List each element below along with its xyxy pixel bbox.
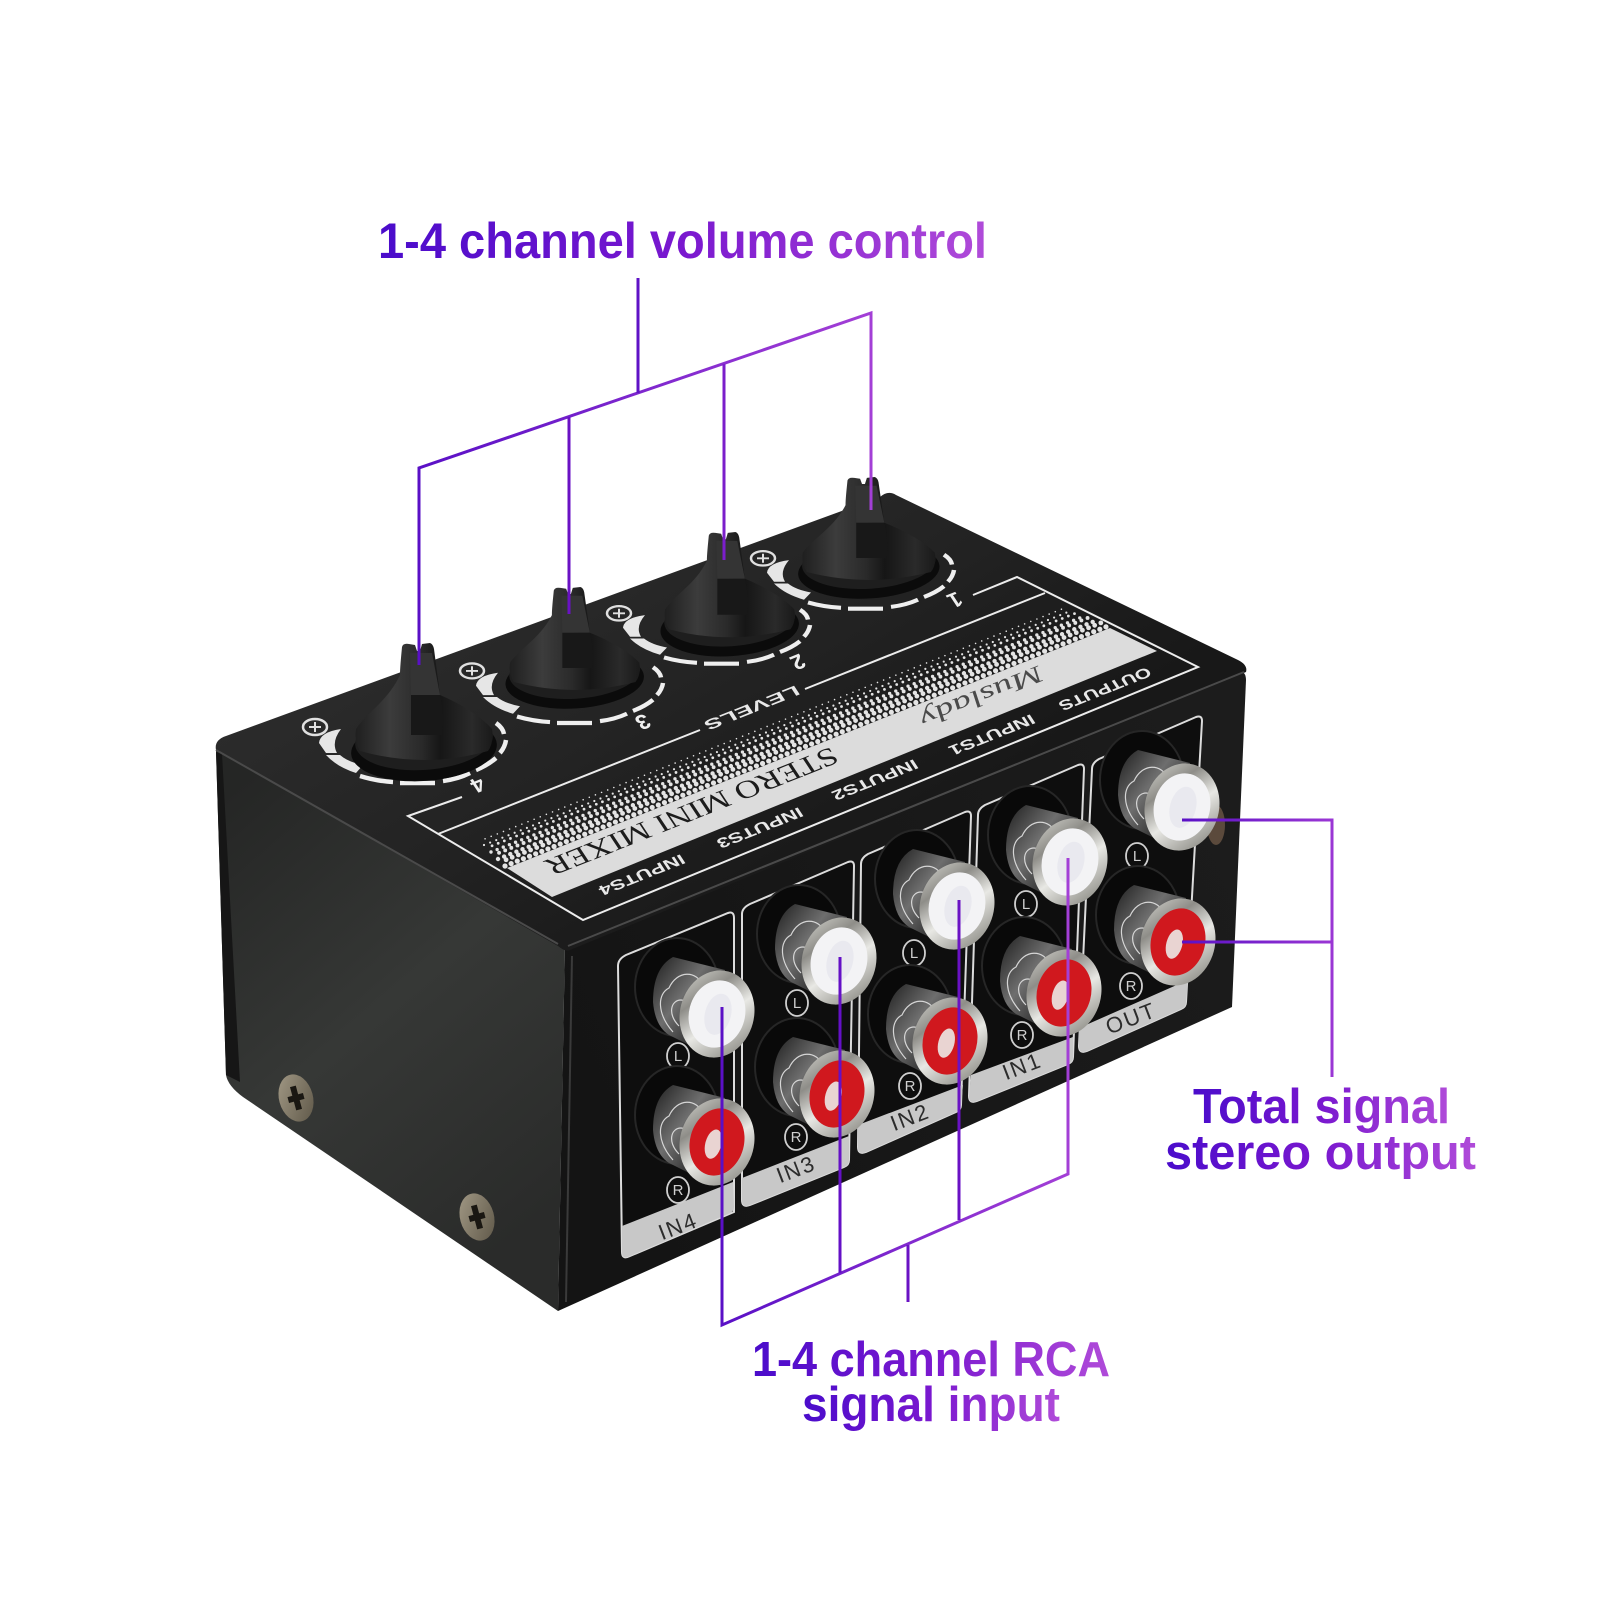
channel mark letters: R xyxy=(905,1078,916,1095)
heading: volume control: 1-4 channel volume control xyxy=(378,213,987,269)
callout lines: RCA input xyxy=(722,858,1068,1325)
front face xyxy=(558,671,1246,1311)
knob 2 xyxy=(658,532,801,661)
panel: OUT: OUT xyxy=(1102,997,1160,1039)
dial number 3: 3 xyxy=(630,709,655,735)
panel: IN3: IN3 xyxy=(773,1150,819,1188)
heading: stereo output: stereo output xyxy=(1165,1126,1476,1180)
side seam strip xyxy=(216,752,240,1082)
label: levels: LEVELS xyxy=(700,682,803,733)
halftone dot band xyxy=(482,609,1108,866)
top panel printed frame lines xyxy=(408,577,1198,920)
product: stereo mini mixer xyxy=(216,477,1246,1311)
heading: RCA input xyxy=(752,1333,1110,1432)
left side face xyxy=(216,750,565,1311)
label: outputs: OUTPUTS xyxy=(1055,663,1154,713)
jack: IN3 white xyxy=(757,885,886,1013)
knob 4 xyxy=(349,643,499,786)
channel mark letters: L xyxy=(1022,896,1030,913)
knob 2 dial scale xyxy=(607,606,810,664)
jack: OUT white xyxy=(1100,731,1229,859)
top face xyxy=(216,493,1246,950)
jack: IN3 red xyxy=(755,1018,884,1146)
channel mark letters: L xyxy=(674,1048,682,1065)
dial number 4: 4 xyxy=(465,772,490,798)
dial number 2: 2 xyxy=(785,649,810,675)
knob 3 dial scale xyxy=(460,663,663,723)
front jack panels xyxy=(618,716,1202,1257)
heading: stereo output: Total signal xyxy=(1193,1080,1450,1134)
jack: IN4 white xyxy=(635,938,764,1066)
screw: front xyxy=(454,1189,500,1245)
brand text: Muslady xyxy=(912,660,1051,732)
panel: IN4: IN4 xyxy=(655,1207,701,1245)
heading: RCA input: signal input xyxy=(802,1378,1060,1432)
channel marks L and R xyxy=(667,843,1148,1203)
knob 1 xyxy=(796,477,942,603)
heading: RCA input: 1-4 channel RCA xyxy=(752,1333,1110,1387)
label: inputs 2: INPUTS2 xyxy=(828,756,921,803)
label: inputs 3: INPUTS3 xyxy=(713,804,806,851)
channel mark letters: R xyxy=(1126,978,1137,995)
channel mark letters: R xyxy=(1017,1027,1028,1044)
panel: IN1: IN1 xyxy=(999,1047,1045,1085)
callout lines: stereo output xyxy=(1182,820,1332,1077)
panel: OUT xyxy=(1079,716,1202,1052)
knob 3 xyxy=(503,587,646,713)
channel mark letters: L xyxy=(1133,848,1141,865)
screw: rear xyxy=(273,1070,319,1126)
label: inputs 1: INPUTS1 xyxy=(945,711,1038,758)
channel mark letters: R xyxy=(791,1129,802,1146)
panel: IN4 xyxy=(618,913,734,1257)
jack: IN2 red xyxy=(868,965,997,1093)
callout lines: volume control xyxy=(419,278,871,665)
jack: IN2 white xyxy=(875,830,1004,958)
dial number 1: 1 xyxy=(942,587,967,613)
panel: IN3 xyxy=(742,862,854,1206)
knob 4 dial scale xyxy=(303,719,506,783)
knob 1 dial scale xyxy=(751,551,954,609)
panel: IN1 xyxy=(969,764,1084,1102)
channel mark letters: L xyxy=(910,945,918,962)
channel mark letters xyxy=(673,848,1141,1199)
panel: IN2: IN2 xyxy=(887,1098,933,1136)
strip title text: STERO MINI MIXER xyxy=(539,742,844,881)
heading: stereo output xyxy=(1165,1080,1476,1180)
channel mark letters: L xyxy=(793,995,801,1012)
label: inputs 4: INPUTS4 xyxy=(594,851,688,898)
panel: IN2 xyxy=(858,812,971,1153)
silver title strip xyxy=(507,628,1157,897)
rear terminal nut xyxy=(1207,805,1225,845)
jack: OUT red xyxy=(1096,866,1225,994)
jack: IN1 white xyxy=(988,786,1117,914)
jack: IN1 red xyxy=(982,917,1111,1045)
jack: IN4 red xyxy=(635,1066,764,1194)
channel mark letters: R xyxy=(673,1182,684,1199)
